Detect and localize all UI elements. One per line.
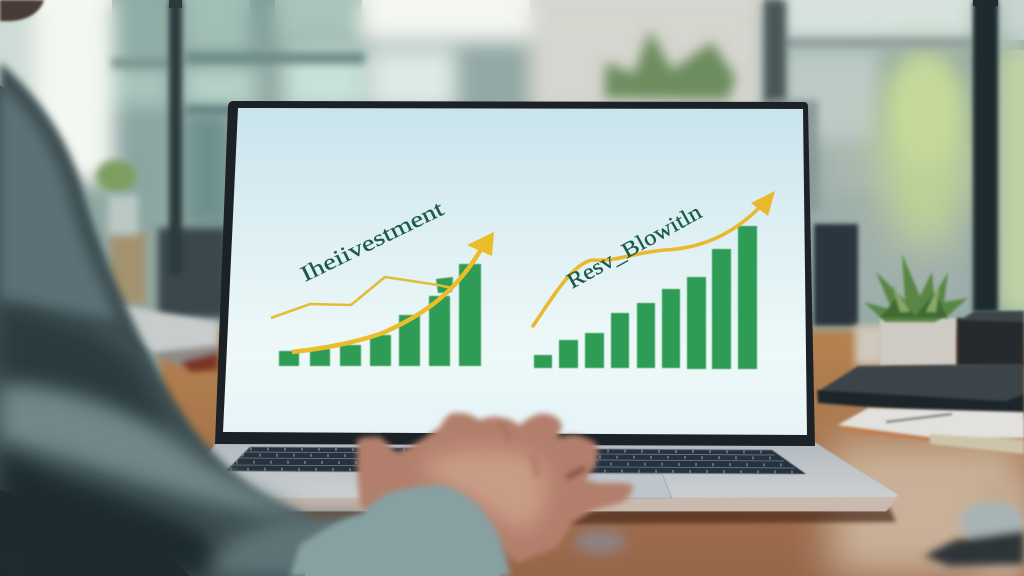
left trend arrow xyxy=(292,232,494,352)
left bars xyxy=(279,264,481,366)
dark head corner, top left xyxy=(0,0,44,21)
jacket backing xyxy=(0,85,320,576)
potted plant, right xyxy=(864,254,968,366)
wooden desk xyxy=(160,325,1024,576)
blurred background plant, top centre xyxy=(604,30,736,100)
jacket dark backing lower xyxy=(0,490,190,576)
papers and pen, right xyxy=(838,408,1024,454)
sleeve cuff xyxy=(290,485,510,576)
jacket dark fold xyxy=(0,305,175,440)
blue reflection on desk below hand xyxy=(574,530,626,554)
jacket upper highlight xyxy=(0,85,115,320)
screen xyxy=(223,108,807,435)
blurred small plant, left xyxy=(96,160,146,304)
jacket sleeve lower xyxy=(205,514,370,576)
right bars xyxy=(534,226,757,369)
stack of books xyxy=(817,364,1024,419)
left thin line xyxy=(271,277,452,318)
jacket dark lower xyxy=(0,450,230,576)
dark box behind books xyxy=(957,311,1024,366)
mouse and watch, bottom right xyxy=(924,502,1024,566)
green garden blur xyxy=(879,50,971,250)
hand xyxy=(357,413,633,563)
laptop front edge xyxy=(250,497,897,511)
trackpad xyxy=(455,474,672,498)
right trend arrow xyxy=(533,191,775,326)
plant leaves xyxy=(864,254,968,322)
screen bezel xyxy=(215,101,815,446)
papers on left side of desk xyxy=(112,304,218,372)
keyboard xyxy=(226,447,806,474)
laptop shadow on desk xyxy=(280,508,896,526)
left chart label: Iheiivestment xyxy=(296,196,447,286)
jacket torso, dark xyxy=(0,62,340,576)
person's shoulder and arm xyxy=(0,62,370,576)
chart: investment growth, left xyxy=(271,196,494,366)
jacket mid highlight xyxy=(0,385,310,515)
chart: growth, right xyxy=(533,191,775,369)
right chart label: Resv_Blowitln xyxy=(562,199,706,293)
plant pot xyxy=(880,318,956,366)
laptop base xyxy=(195,443,898,511)
laptop xyxy=(195,101,898,526)
